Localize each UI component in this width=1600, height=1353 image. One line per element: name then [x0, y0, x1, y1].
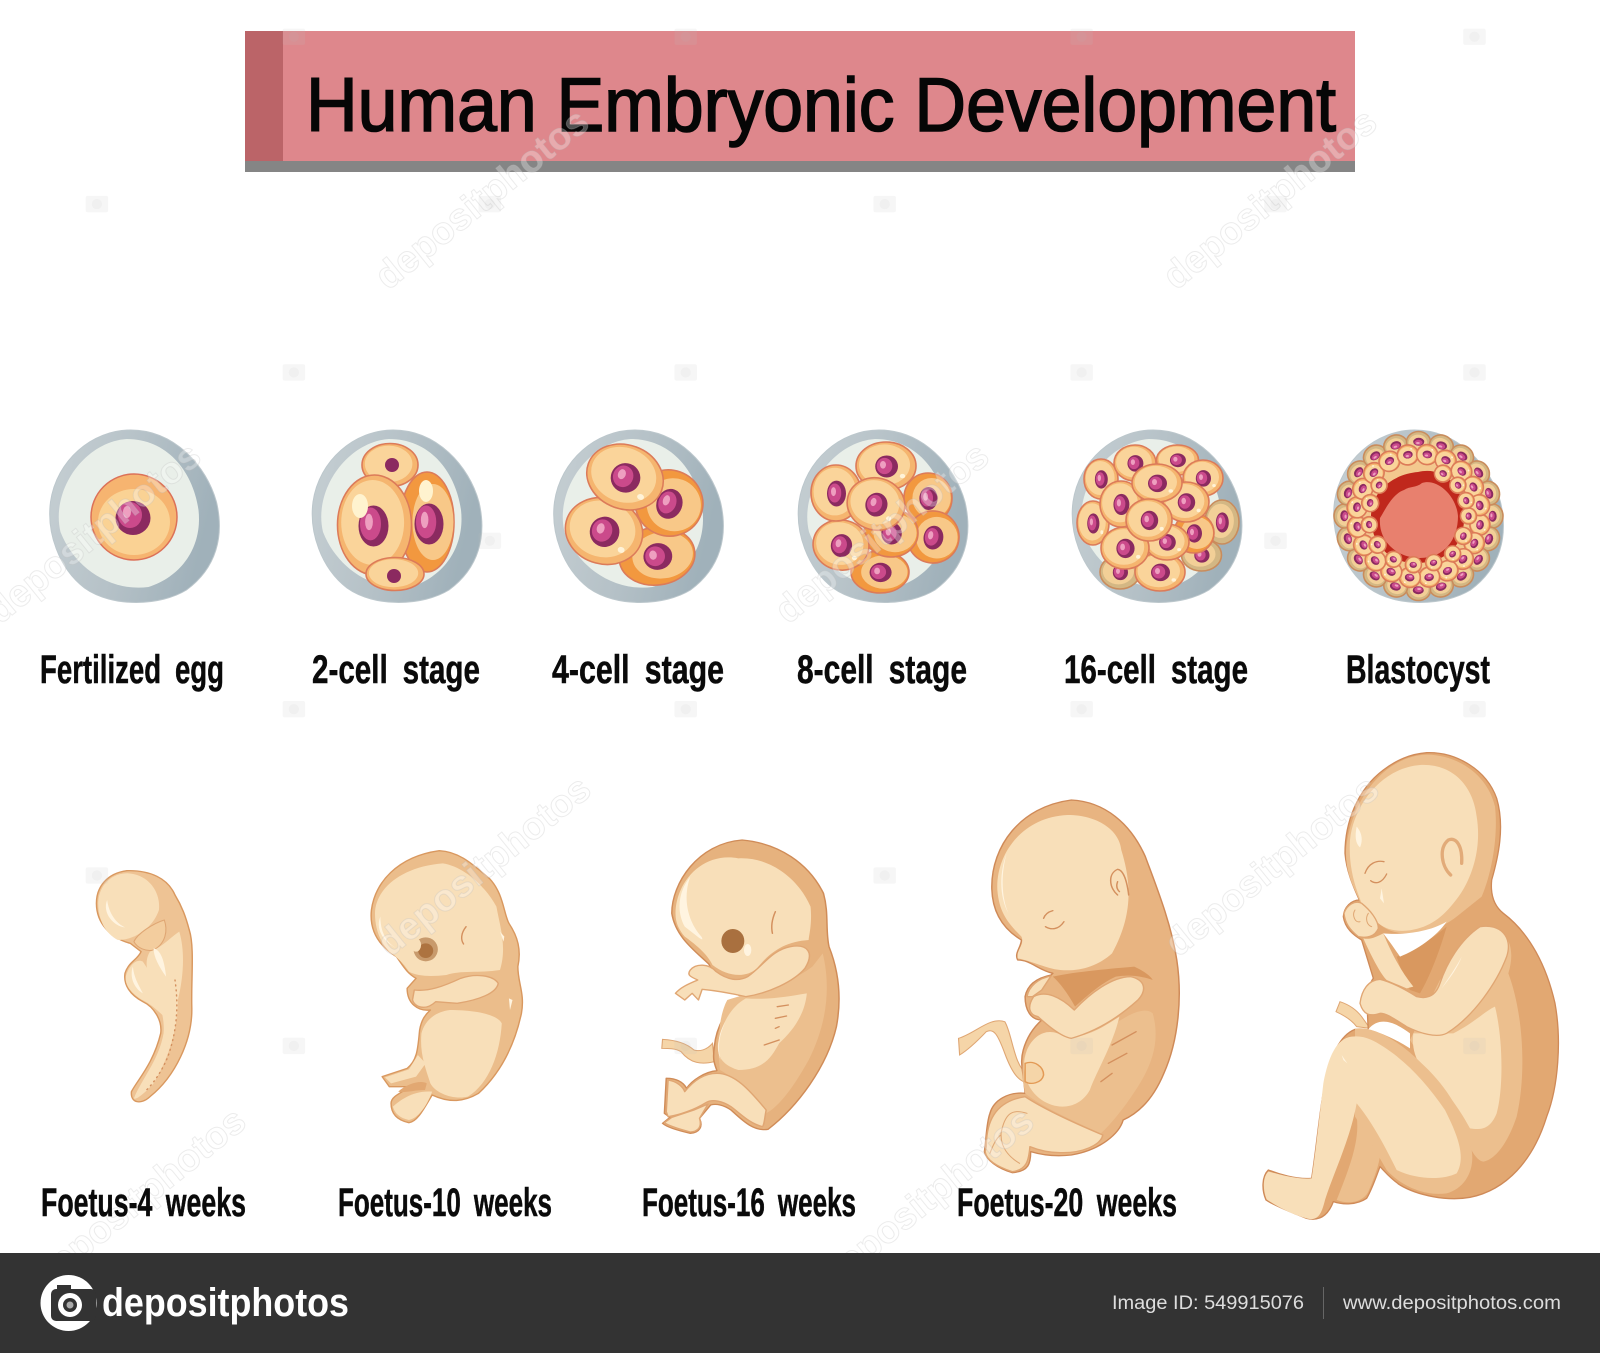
- footer bar: [0, 1253, 1600, 1353]
- logo wordmark: depositphotos: [102, 1281, 349, 1325]
- logo icon: [40, 1275, 96, 1331]
- watermark: depositphotos: [367, 101, 597, 298]
- stage: 4-cell: [554, 430, 723, 602]
- stage labels: Fertilized egg: [40, 648, 224, 692]
- foetus labels: Foetus-4 weeks: [41, 1181, 246, 1225]
- stage labels: 8-cell stage: [797, 648, 967, 692]
- stage labels: 16-cell stage: [1064, 648, 1248, 692]
- watermark: depositphotos: [369, 768, 599, 965]
- foetus: 20 weeks: [959, 800, 1179, 1173]
- foetus labels: Foetus-16 weeks: [642, 1181, 856, 1225]
- image id: Image ID: 549915076: [1112, 1293, 1304, 1314]
- stage labels: 4-cell stage: [552, 648, 724, 692]
- stage: 8-cell: [798, 430, 968, 602]
- title: Human Embryonic Development: [306, 63, 1336, 148]
- stage labels: Blastocyst: [1346, 648, 1490, 692]
- watermark: depositphotos: [1155, 101, 1385, 298]
- foetus labels: Foetus-20 weeks: [957, 1181, 1177, 1225]
- watermark: depositphotos: [767, 435, 997, 632]
- watermark: depositphotos: [812, 1100, 1042, 1297]
- foetus: 10 weeks: [371, 851, 522, 1123]
- title banner: [245, 31, 1355, 172]
- watermark: depositphotos: [24, 1100, 254, 1297]
- stage: 2-cell: [312, 430, 482, 602]
- stage labels: [40, 648, 1490, 692]
- foetus labels: [41, 1181, 1177, 1225]
- stage: blastocyst: [1334, 430, 1503, 602]
- stage: 16-cell: [1072, 430, 1242, 602]
- foetus: 4 weeks: [96, 871, 192, 1102]
- stage: fertilized egg: [50, 430, 219, 602]
- foetus: 16 weeks: [662, 840, 839, 1133]
- website: www.depositphotos.com: [1342, 1293, 1561, 1314]
- stage labels: 2-cell stage: [312, 648, 480, 692]
- foetus labels: Foetus-10 weeks: [338, 1181, 552, 1225]
- watermark: depositphotos: [1157, 768, 1387, 965]
- foetus: full term: [1263, 753, 1558, 1219]
